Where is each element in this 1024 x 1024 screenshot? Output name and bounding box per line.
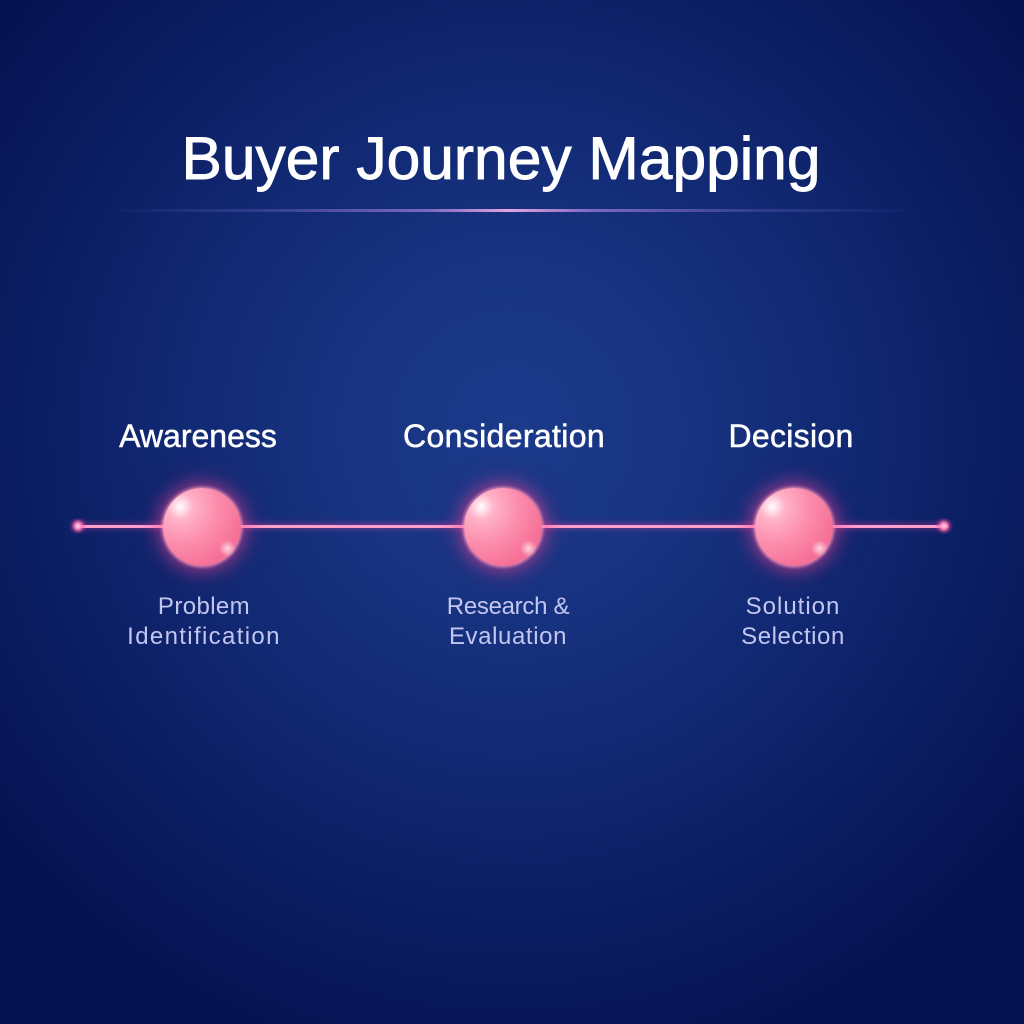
heading: Consideration: Consideration	[403, 418, 605, 454]
stage: Consideration	[403, 418, 605, 650]
timeline line	[69, 518, 953, 534]
title: Buyer Journey Mapping	[182, 124, 820, 192]
node: Consideration	[464, 488, 542, 566]
description: Decision: Solution	[746, 593, 840, 620]
description: Decision: Selection	[741, 623, 845, 650]
node: Decision	[755, 488, 833, 566]
stage: Decision	[728, 418, 854, 650]
heading: Decision: Decision	[728, 418, 854, 454]
description: Consideration	[447, 593, 570, 650]
description: Awareness: Identification	[127, 623, 281, 650]
heading: Awareness: Awareness	[119, 418, 277, 454]
node: Awareness	[163, 488, 241, 566]
description: Awareness	[127, 593, 281, 650]
stage: Awareness	[118, 418, 281, 650]
description: Decision	[741, 593, 845, 650]
title underline	[100, 209, 920, 212]
description: Consideration: Evaluation	[449, 623, 567, 650]
description: Awareness: Problem	[158, 593, 250, 620]
description: Consideration: Research &	[447, 593, 569, 620]
